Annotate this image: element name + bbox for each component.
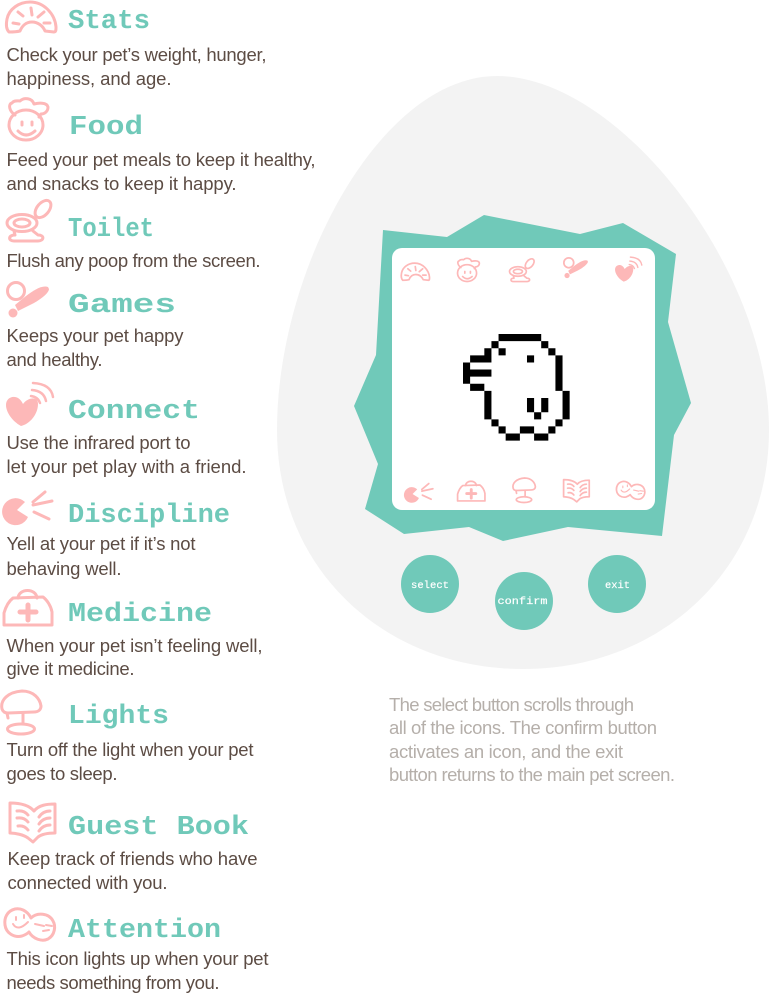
text: attention: needs something from you. [6, 972, 220, 993]
text: guest book: connected with you. [8, 872, 168, 893]
select button [401, 555, 459, 613]
icon: yelling mouth [2, 492, 52, 525]
heading: stats: Stats [68, 7, 150, 37]
text: games [6, 325, 184, 370]
section: connect [6, 383, 246, 477]
button explanation note: all of the icons. The confirm button [389, 717, 657, 738]
heading: lights: Lights [68, 702, 169, 732]
text: medicine [6, 635, 262, 679]
text: medicine: When your pet isn’t feeling well, [6, 635, 262, 656]
screen icons: bottom row [404, 478, 645, 503]
button explanation note: The select button scrolls through [389, 694, 634, 715]
text: food: and snacks to keep it happy. [6, 173, 236, 194]
pixel pet [463, 334, 570, 441]
text: attention [6, 948, 268, 993]
text: lights: goes to sleep. [6, 763, 118, 784]
heading: discipline: Discipline [68, 501, 230, 531]
text: games: Keeps your pet happy [6, 325, 184, 346]
section: guest book [8, 803, 258, 893]
text: lights: Turn off the light when your pet [6, 739, 254, 760]
heading: connect: Connect [68, 397, 200, 427]
screen icons: top row [401, 257, 642, 282]
text: guest book [8, 848, 258, 893]
text: stats: Check your pet’s weight, hunger, [6, 44, 266, 65]
section: games [6, 282, 184, 370]
exit button [588, 555, 646, 613]
icon: lamp [2, 691, 41, 734]
icon: bat and ball [8, 282, 49, 318]
icon: toilet [7, 197, 54, 241]
confirm button: confirm [498, 596, 548, 608]
select button: select [411, 580, 449, 592]
text: connect: let your pet play with a friend. [6, 456, 246, 477]
heading: toilet: Toilet [68, 215, 154, 245]
text: lights [6, 739, 254, 784]
section: stats [6, 2, 267, 89]
icon: heart with signal [6, 383, 53, 426]
section: lights [2, 691, 253, 784]
text: food [6, 149, 316, 194]
icon: chef face [9, 99, 48, 140]
section: discipline [2, 492, 230, 579]
heading: medicine: Medicine [68, 600, 212, 630]
heading: food: Food [69, 113, 143, 143]
egg body [277, 76, 769, 669]
text: stats: happiness, and age. [6, 68, 172, 89]
text: discipline: Yell at your pet if it’s not [6, 533, 196, 554]
exit button: exit [605, 580, 630, 592]
icon: stats gauge [6, 2, 56, 32]
text: connect: Use the infrared port to [6, 432, 190, 453]
text: attention: This icon lights up when your pet [6, 948, 268, 969]
section: toilet [6, 197, 260, 271]
icon: medicine bag [4, 590, 52, 625]
teal jagged frame [354, 215, 691, 541]
text: discipline: behaving well. [6, 558, 122, 579]
button explanation note [389, 694, 675, 785]
text: connect [6, 432, 246, 477]
text: discipline [6, 533, 196, 579]
text: games: and healthy. [6, 349, 102, 370]
icon: two faces [5, 909, 55, 940]
section: attention [5, 909, 268, 993]
text: stats [6, 44, 266, 89]
text: toilet: Flush any poop from the screen. [6, 250, 260, 271]
heading: guest book: Guest Book [68, 813, 249, 843]
text: food: Feed your pet meals to keep it healthy, [6, 149, 316, 170]
text: medicine: give it medicine. [6, 658, 134, 679]
heading: attention: Attention [68, 916, 221, 946]
heading: games: Games [68, 291, 176, 321]
section: medicine [4, 590, 262, 679]
section: food [6, 99, 316, 194]
icon: open book [10, 803, 55, 842]
text: guest book: Keep track of friends who have [8, 848, 258, 869]
screen panel [392, 248, 655, 510]
confirm button [495, 572, 553, 630]
button explanation note: button returns to the main pet screen. [389, 764, 675, 785]
button explanation note: activates an icon, and the exit [389, 741, 623, 762]
